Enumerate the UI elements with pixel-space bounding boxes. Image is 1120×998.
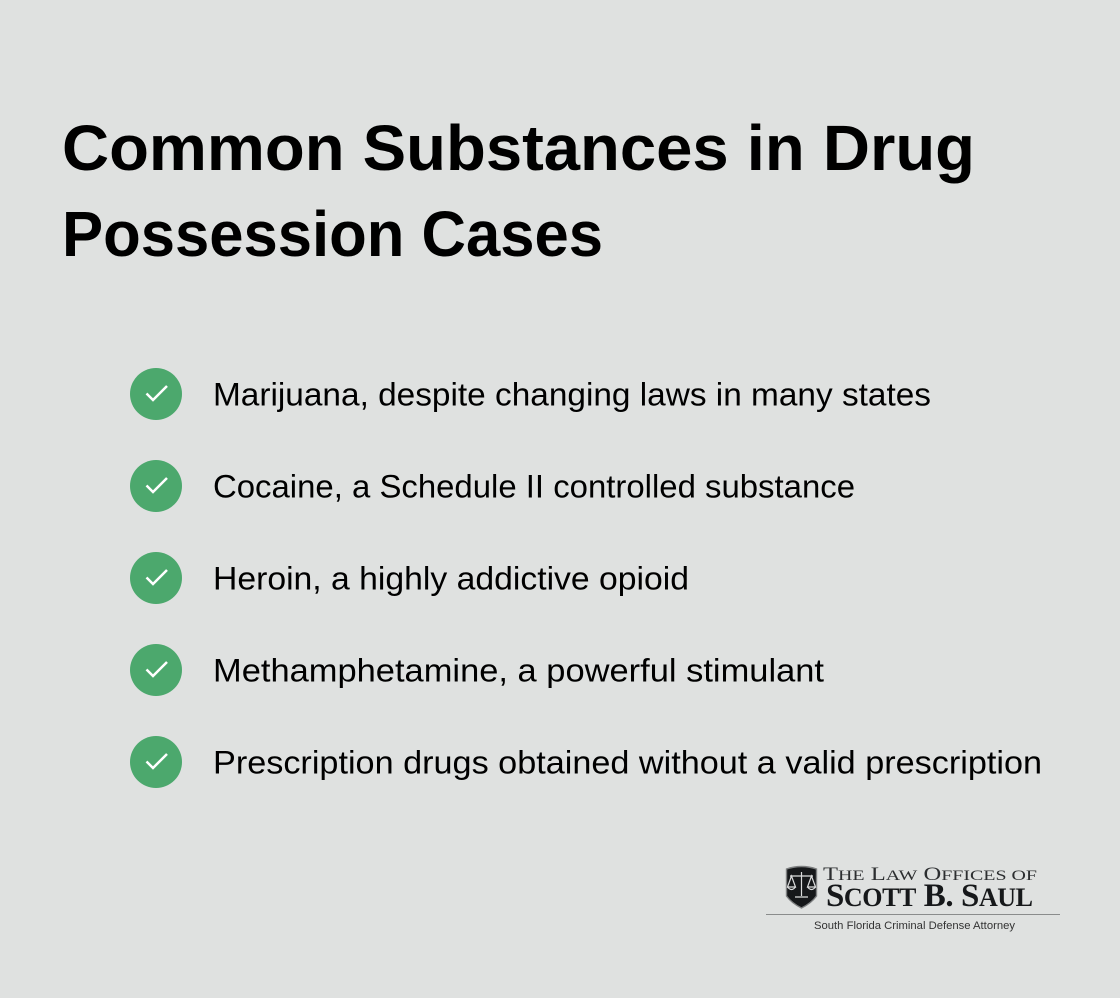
item: cocaine: Cocaine, a Schedule II controlled substance (213, 468, 855, 504)
icon: shield with scales (786, 866, 816, 908)
item: methamphetamine: Methamphetamine, a powerful stimulant (213, 652, 824, 688)
item: prescription drugs (130, 736, 1042, 788)
item: marijuana (130, 368, 931, 420)
item: methamphetamine (130, 644, 824, 696)
logo line: the law offices of: THE L AW O FFICES OF (823, 865, 1037, 885)
item: heroin: Heroin, a highly addictive opioid (213, 560, 689, 596)
title: Common Substances in Drug (62, 112, 975, 184)
logo line: scott b. saul: SCOTT B. SAUL (826, 878, 1033, 914)
checklist of substances (130, 368, 1042, 788)
item: heroin (130, 552, 689, 604)
title (62, 112, 975, 270)
logo tagline: South Florida Criminal Defense Attorney (814, 920, 1016, 932)
item: marijuana: Marijuana, despite changing laws in many states (213, 376, 931, 412)
item: prescription drugs: Prescription drugs obtained without a valid prescription (213, 744, 1042, 780)
title: Possession Cases (62, 198, 603, 270)
law office logo (766, 865, 1060, 932)
item: cocaine (130, 460, 855, 512)
